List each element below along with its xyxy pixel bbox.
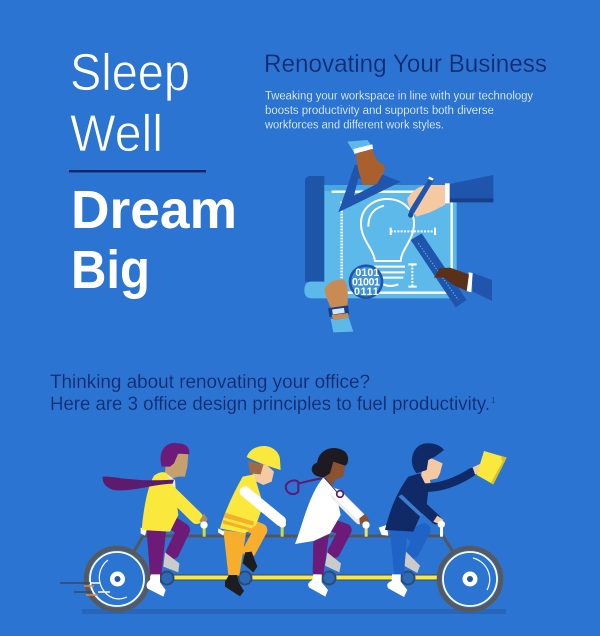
prompt text: 1 <box>491 396 496 405</box>
rider 2: hard hat and safety vest <box>218 446 286 596</box>
prompt text: Here are 3 office design principles to fuel productivity. <box>50 394 490 415</box>
blueprint border lines <box>332 192 452 293</box>
ground shadow <box>82 609 506 614</box>
set square and hand <box>338 140 401 212</box>
dotted measure <box>338 202 346 278</box>
heading: Renovating Your Business: Renovating Your Business <box>264 50 547 78</box>
title divider <box>69 170 206 172</box>
title: Dream Big: Big <box>71 240 150 300</box>
title: Sleep Well <box>70 44 190 163</box>
blueprint roll <box>304 176 457 298</box>
tandem bicycle <box>60 536 501 610</box>
light bulb drawing <box>361 199 435 287</box>
intro paragraph: workforces and different work styles. <box>264 118 444 132</box>
title: Dream Big <box>71 180 237 300</box>
magnifier with binary digits: 0101 <box>355 267 379 279</box>
front wheel <box>439 548 501 610</box>
prompt text: Thinking about renovating your office? <box>50 372 370 393</box>
title block <box>69 44 237 300</box>
rear wheel <box>86 548 148 610</box>
prompt text <box>50 372 496 415</box>
yellow drive bar <box>120 575 468 580</box>
intro paragraph <box>264 88 534 132</box>
frame <box>118 536 470 579</box>
title: Sleep Well: Well <box>70 105 163 163</box>
blueprint illustration <box>304 140 493 332</box>
magnifier with binary digits: 01001 <box>352 277 380 289</box>
ruler and hand <box>411 233 492 307</box>
hand with pen <box>407 175 493 218</box>
intro paragraph: Tweaking your workspace in line with your technology <box>265 88 534 102</box>
hand with smartwatch <box>324 280 353 332</box>
magnifier with binary digits <box>349 264 383 299</box>
rider 3: doctor with stethoscope <box>286 448 370 597</box>
speed lines <box>60 583 110 595</box>
rider 1: yellow jacket with scarf <box>103 443 208 597</box>
title: Sleep Well: Sleep <box>70 44 190 102</box>
pedal gears <box>160 572 414 584</box>
title: Dream Big: Dream <box>71 180 237 240</box>
rider 4: navy sweater holding note <box>379 443 507 597</box>
magnifier with binary digits: 0111 <box>354 286 379 298</box>
intro paragraph: boosts productivity and supports both diverse <box>265 103 494 117</box>
